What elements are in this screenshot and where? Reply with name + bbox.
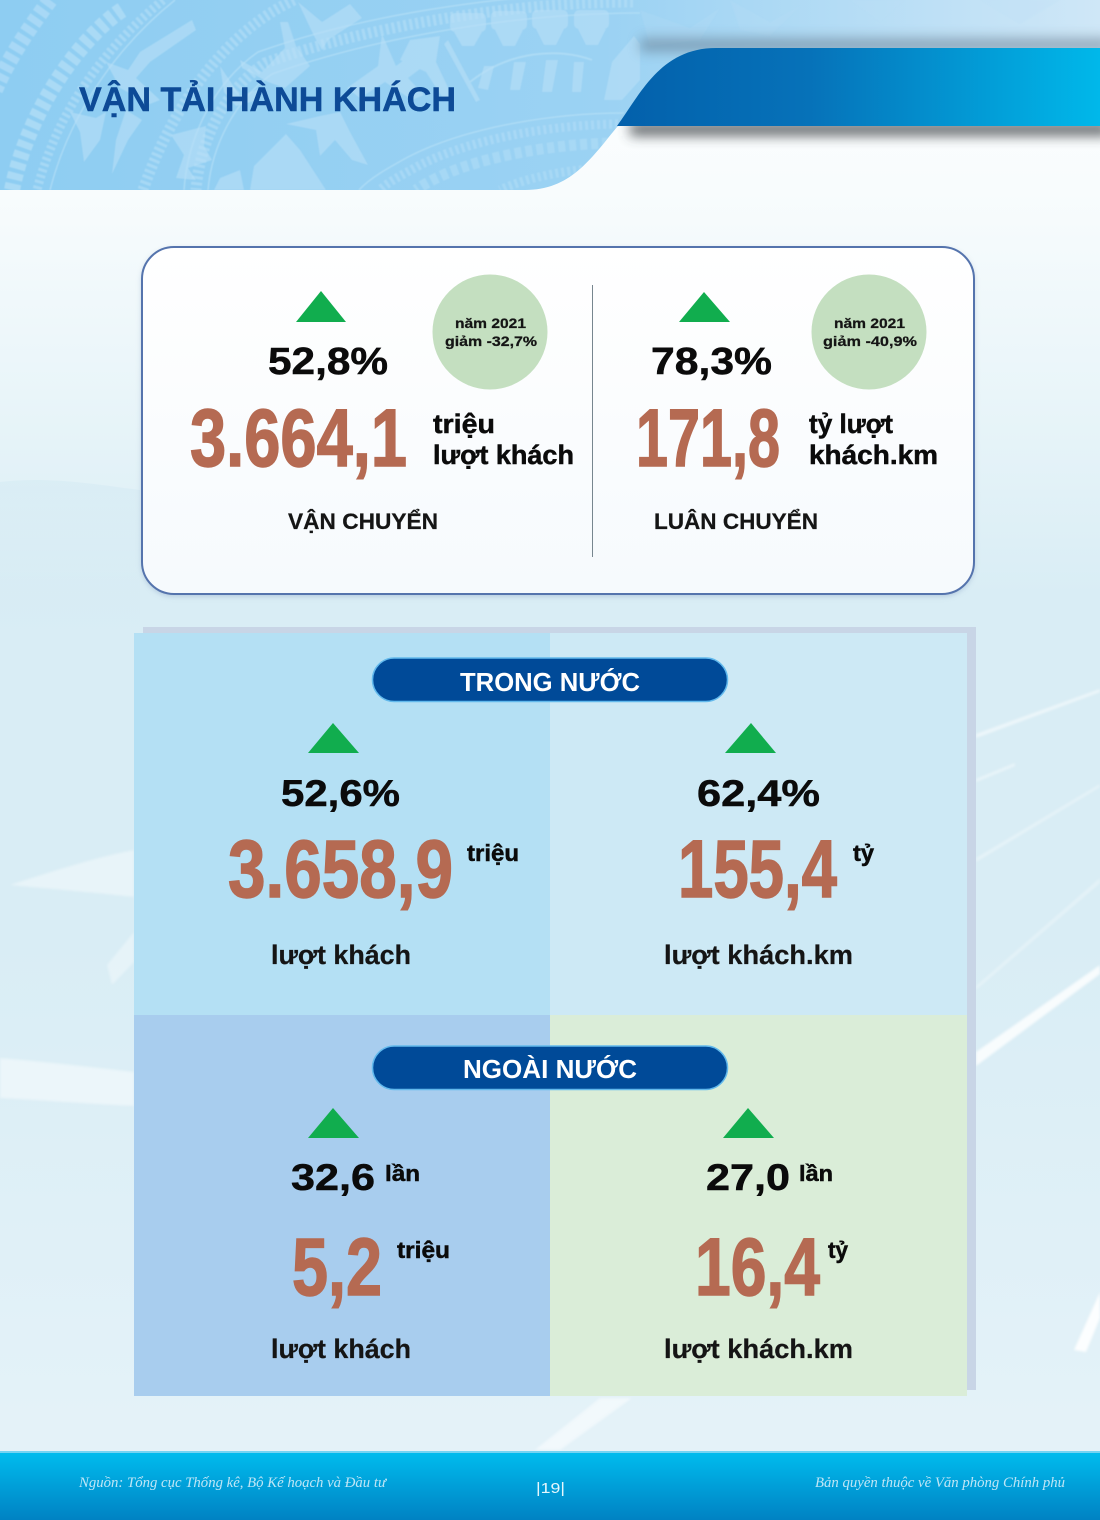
title: VẬN TẢI HÀNH KHÁCH <box>79 81 456 119</box>
change unit: lần <box>385 1161 420 1186</box>
main value: 171,8 <box>636 393 780 484</box>
panel: summary card <box>142 247 974 596</box>
unit: tỷ <box>828 1237 848 1263</box>
label: lượt khách <box>271 1334 411 1364</box>
callout: 2021 comparison: giảm -32,7% <box>445 333 538 349</box>
page number: |19| <box>536 1480 565 1497</box>
heading pill: trong nước <box>372 658 728 702</box>
label: lượt khách <box>271 940 411 970</box>
header ribbon <box>617 38 1100 136</box>
percent change: 52,8% <box>268 341 388 383</box>
percent change: 52,6% <box>281 773 400 814</box>
panel: luân chuyển <box>636 274 938 534</box>
percent change: 62,4% <box>697 773 820 814</box>
change unit: lần <box>799 1161 833 1186</box>
callout: 2021 comparison: giảm -40,9% <box>823 333 918 349</box>
panel: domestic passenger-km <box>550 633 967 1015</box>
main value: 16,4 <box>695 1222 820 1313</box>
unit <box>433 409 574 470</box>
label: LUÂN CHUYỂN <box>654 509 818 534</box>
callout: 2021 comparison: năm 2021 <box>455 315 526 331</box>
panel: international passenger-km <box>550 1015 967 1396</box>
main value: 5,2 <box>292 1222 382 1313</box>
source note: Nguồn: Tổng cục Thống kê, Bộ Kế hoạch và Đầu tư <box>78 1475 388 1491</box>
change multiple: 27,0 <box>706 1157 790 1198</box>
icon: up arrow <box>308 1108 359 1138</box>
unit: triệu <box>433 409 495 439</box>
icon: up arrow <box>296 291 346 322</box>
unit: triệu <box>397 1237 450 1263</box>
unit: tỷ <box>853 840 874 866</box>
decorative birds and deer <box>106 20 196 104</box>
percent change: 78,3% <box>651 341 772 383</box>
panel shadow block <box>143 627 976 1390</box>
change multiple: 32,6 <box>291 1157 375 1198</box>
unit: triệu <box>467 840 519 866</box>
unit: lượt khách <box>433 440 574 470</box>
callout: 2021 comparison <box>812 274 926 390</box>
panel: domestic passengers <box>134 633 550 1015</box>
heading pill: ngoài nước <box>372 1046 728 1090</box>
icon: up arrow <box>679 292 730 322</box>
callout: 2021 comparison <box>432 274 548 390</box>
unit: khách.km <box>809 440 938 470</box>
main value: 3.664,1 <box>190 393 407 484</box>
icon: up arrow <box>308 723 359 753</box>
main value: 155,4 <box>678 824 837 915</box>
label: lượt khách.km <box>664 1334 853 1364</box>
icon: up arrow <box>723 1108 774 1138</box>
label: VẬN CHUYỂN <box>288 509 438 534</box>
label: lượt khách.km <box>664 940 853 970</box>
header panel: bronze drum pattern <box>0 0 1100 190</box>
unit: tỷ lượt <box>809 409 893 439</box>
panel: international passengers <box>134 1015 550 1396</box>
unit <box>809 409 938 470</box>
footer <box>0 1451 1100 1520</box>
callout: 2021 comparison: năm 2021 <box>834 315 905 331</box>
heading pill: trong nước: TRONG NƯỚC <box>460 667 640 697</box>
heading pill: ngoài nước: NGOÀI NƯỚC <box>463 1054 637 1084</box>
panel: vận chuyển <box>190 274 574 534</box>
icon: up arrow <box>725 723 776 753</box>
copyright note: Bản quyền thuộc về Văn phòng Chính phủ <box>815 1475 1065 1491</box>
main value: 3.658,9 <box>228 824 453 915</box>
